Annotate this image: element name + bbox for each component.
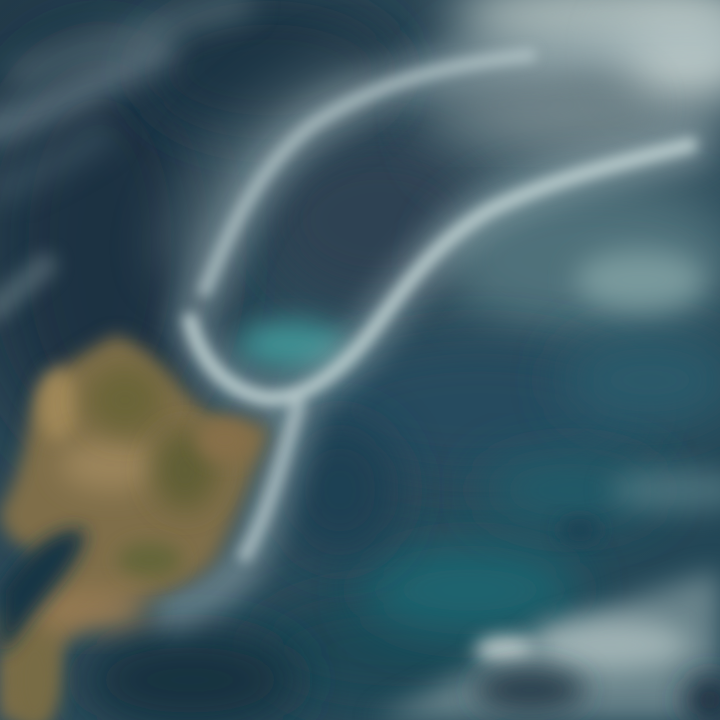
surf bottom right [370, 468, 720, 720]
bright cloud top right [420, 0, 720, 310]
swirl bands [170, 43, 720, 610]
land mass [0, 335, 270, 720]
bright swirl core [190, 55, 690, 555]
soft halo around swirl [170, 43, 720, 610]
cloud wisps top left [0, 5, 350, 310]
teal lagoon [237, 321, 347, 369]
inlet [0, 530, 85, 655]
